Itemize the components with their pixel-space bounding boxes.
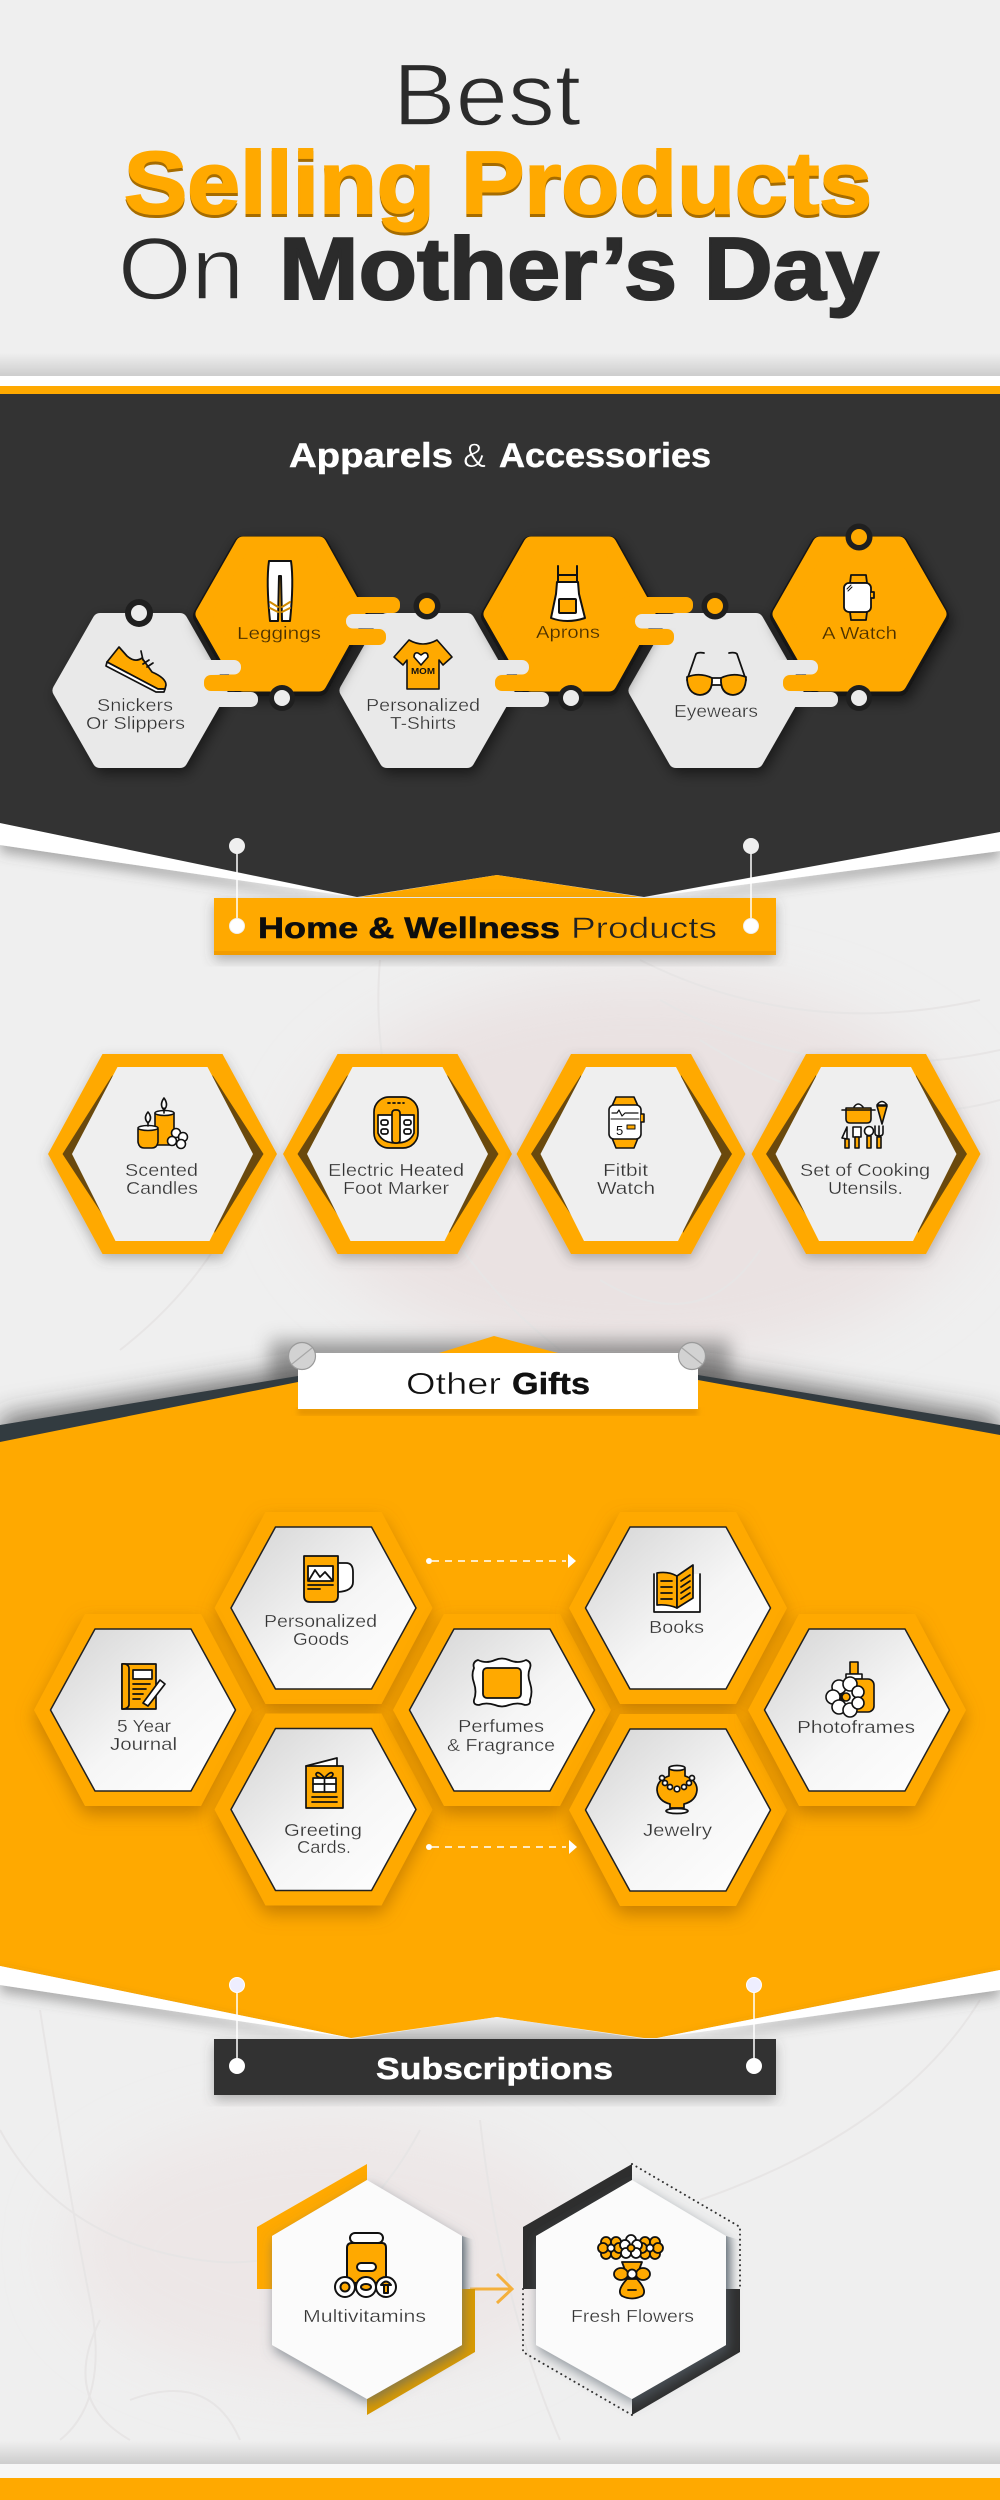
item: photoframes: Photoframes (797, 1717, 915, 1737)
icon: book (654, 1565, 700, 1612)
item: books (569, 1512, 787, 1704)
icon: utensils (842, 1102, 887, 1148)
pins: subscriptions banner (230, 1978, 762, 2074)
icon: mug (304, 1556, 353, 1602)
icon: necklace (657, 1766, 697, 1814)
item: perfumes and fragrance (393, 1614, 611, 1806)
icon: fitbit (609, 1097, 644, 1148)
icon: greeting card (306, 1758, 343, 1808)
item: multivitamins: Multivitamins (303, 2306, 426, 2326)
item: photoframes (748, 1614, 966, 1806)
item: personalized goods (214, 1512, 432, 1704)
white bands under orange panel (0, 1966, 1000, 2038)
item: set of cooking utensils: Set of Cooking (800, 1160, 930, 1180)
icon: shoe (106, 647, 166, 692)
panel: other gifts (0, 1340, 1000, 2038)
arrow: top dashed (426, 1554, 576, 1568)
arrow: multivitamins to flowers (470, 2274, 512, 2303)
item: perfumes and fragrance: & Fragrance (447, 1735, 555, 1755)
item: scented candles: Scented (125, 1160, 198, 1180)
item: greeting cards (214, 1714, 432, 1906)
item: scented candles: Candles (126, 1178, 198, 1198)
footer (0, 2441, 1000, 2500)
title: Selling Products (124, 133, 872, 232)
grey hexagons (60, 620, 796, 760)
item: fitbit watch: Fitbit (603, 1160, 648, 1180)
banner: home and wellness products: Products (571, 912, 717, 945)
item: eyewears: Eyewears (674, 701, 758, 721)
connector tabs (195, 597, 838, 707)
banner: other gifts (288, 1336, 706, 1415)
item: greeting cards: Greeting (284, 1820, 362, 1840)
item: fitbit watch: Watch (597, 1178, 655, 1198)
orange hexagons (203, 544, 939, 686)
icon: journal (122, 1664, 165, 1709)
item: leggings (237, 561, 321, 643)
orange peak behind banner (360, 875, 641, 897)
title (118, 45, 879, 318)
icon: apron (551, 566, 585, 621)
item: snickers or slippers: Or Slippers (86, 713, 185, 733)
connector dots (125, 524, 872, 711)
item: books: Books (649, 1617, 704, 1637)
title: Best (393, 45, 581, 144)
item: electric heated foot marker: Electric Heated (328, 1160, 464, 1180)
item: set of cooking utensils (752, 1054, 980, 1254)
item: perfumes and fragrance: Perfumes (458, 1716, 544, 1736)
icon: watch (844, 575, 874, 620)
icon: perfume bottle (826, 1662, 874, 1717)
icon: leggings (268, 561, 292, 621)
icon: fitbit: 5 (616, 1123, 623, 1138)
item: electric heated foot marker (283, 1054, 512, 1254)
item: set of cooking utensils: Utensils. (828, 1178, 903, 1198)
icon: candles (138, 1098, 188, 1148)
item: a watch (822, 575, 897, 643)
item: 5 year journal (34, 1614, 252, 1806)
item: jewelry (569, 1714, 787, 1906)
item: aprons: Aprons (536, 622, 600, 642)
icon: t-shirt: MOM (411, 666, 435, 676)
banner: home and wellness products: Home & Wellness (258, 912, 560, 945)
title: Mother’s Day (279, 219, 879, 318)
title: On (118, 219, 244, 318)
banner: subscriptions (214, 2039, 776, 2095)
item: fresh flowers (523, 2164, 740, 2415)
item: leggings: Leggings (237, 623, 321, 643)
item: multivitamins (257, 2164, 475, 2415)
heading: apparels and accessories (289, 437, 711, 475)
item: jewelry: Jewelry (643, 1820, 712, 1840)
item: electric heated foot marker: Foot Marker (343, 1178, 449, 1198)
banner: home and wellness products (214, 898, 776, 955)
item: snickers or slippers: Snickers (97, 695, 173, 715)
icon: picture frame (472, 1658, 532, 1706)
item: personalized t-shirts (366, 640, 480, 733)
icon: flower bouquet (598, 2235, 663, 2298)
banner: other gifts: Gifts (512, 1366, 590, 1401)
dotted outline (523, 2164, 740, 2415)
item: personalized t-shirts: T-Shirts (390, 713, 456, 733)
item: 5 year journal: Journal (110, 1734, 177, 1754)
heading: apparels and accessories: & (463, 437, 486, 475)
banner: other gifts: Other (406, 1366, 501, 1401)
item: fitbit watch (516, 1054, 746, 1254)
icon: foot massager (374, 1097, 418, 1148)
icon: vitamin jar (335, 2233, 396, 2297)
pin: left (288, 1342, 316, 1370)
item: aprons (536, 566, 600, 642)
item: personalized t-shirts: Personalized (366, 695, 480, 715)
item: personalized goods: Goods (293, 1629, 349, 1649)
arrow: bottom dashed (426, 1840, 577, 1854)
item: a watch: A Watch (822, 623, 897, 643)
item: personalized goods: Personalized (264, 1611, 377, 1631)
banner: subscriptions: Subscriptions (376, 2051, 613, 2086)
pin: right (678, 1342, 706, 1370)
white bands under dark panel (0, 823, 1000, 898)
heading: apparels and accessories: Apparels (289, 437, 453, 475)
pins: home banner (230, 838, 758, 934)
heading: apparels and accessories: Accessories (499, 437, 711, 475)
item: eyewears (674, 653, 758, 721)
item: fresh flowers: Fresh Flowers (571, 2306, 694, 2326)
icon: glasses (687, 653, 746, 695)
panel: apparels and accessories (0, 394, 1000, 897)
item: scented candles (48, 1054, 277, 1254)
item: greeting cards: Cards. (297, 1837, 351, 1857)
item: 5 year journal: 5 Year (117, 1716, 171, 1736)
item: snickers or slippers (86, 647, 185, 733)
header gradient strip (0, 353, 1000, 376)
